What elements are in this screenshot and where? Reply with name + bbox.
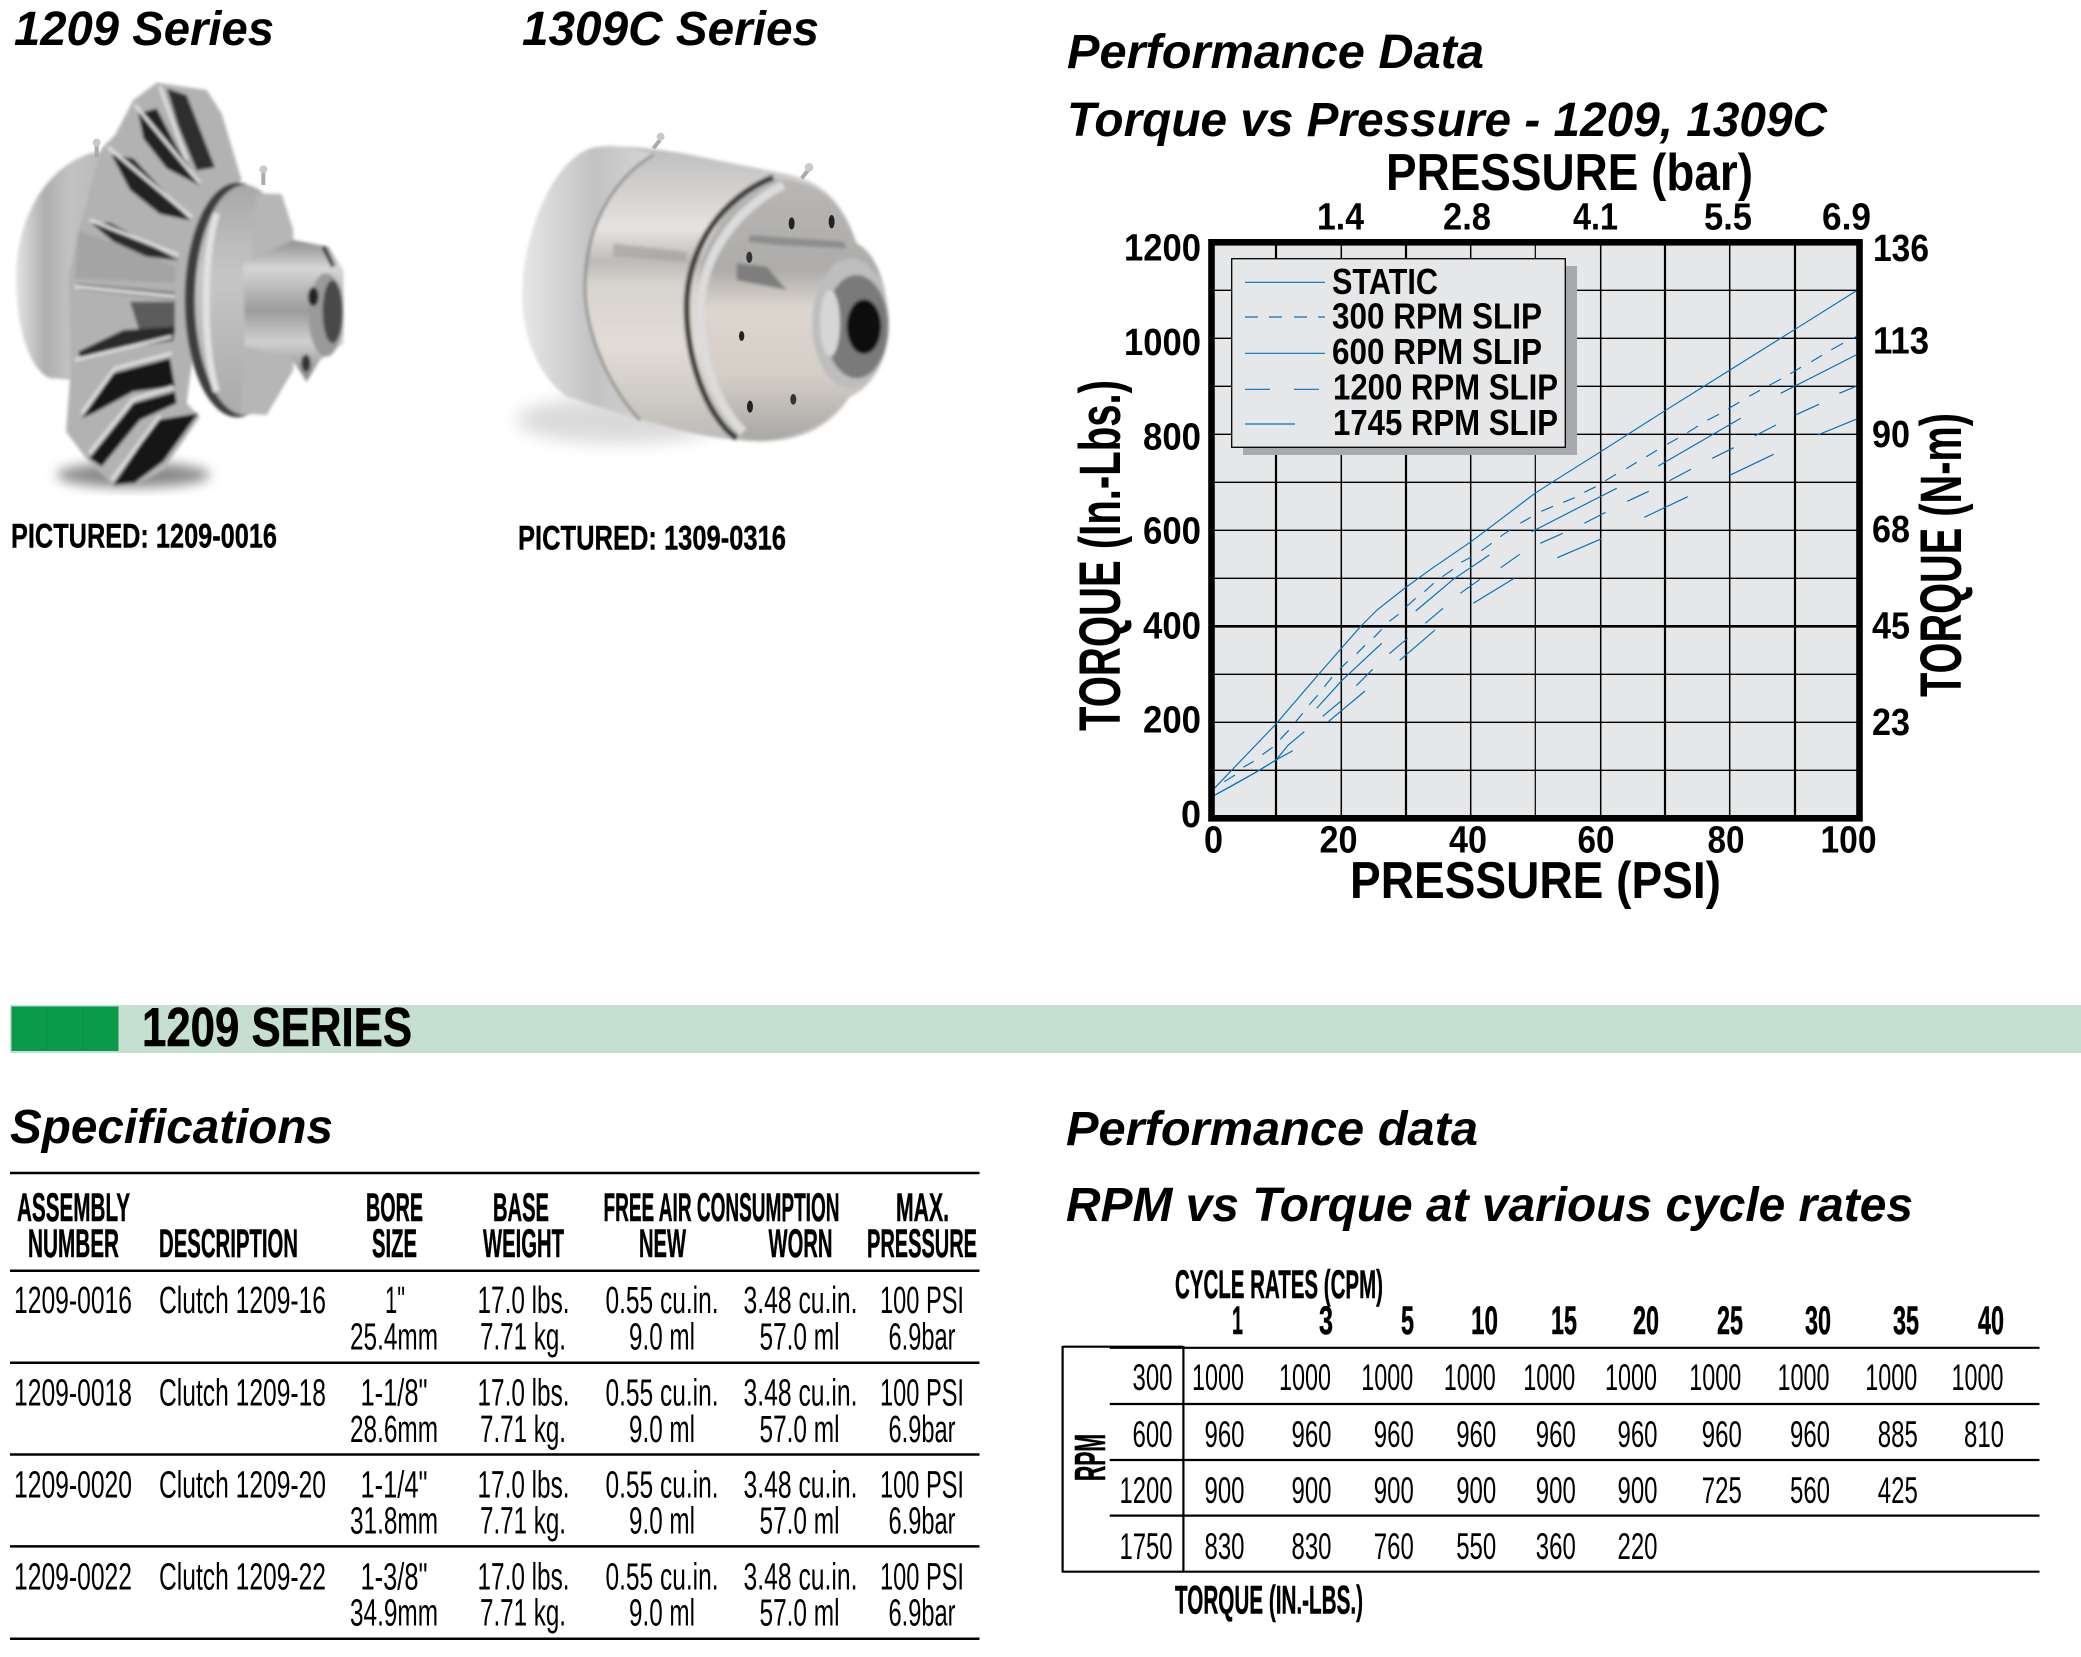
row: 1209-0022: 3.48 cu.in. — [744, 1556, 858, 1598]
row: 600 rpm: 960 — [1618, 1414, 1658, 1455]
heading: 1209 Series: 1209 Series — [14, 3, 274, 56]
table header: BORE — [366, 1186, 423, 1230]
legend: STATIC — [1332, 261, 1438, 302]
row: 300 rpm: 1000 — [1192, 1357, 1244, 1398]
right axis labels: n-m: 23 — [1872, 702, 1910, 744]
row: 1209-0022: 9.0 ml — [629, 1592, 695, 1634]
row: 1209-0020: 7.71 kg. — [480, 1500, 566, 1542]
axis title: torque n-m: TORQUE (N-m) — [1909, 413, 1974, 697]
curve: 300 rpm slip — [1224, 337, 1856, 782]
row: 1209-0016: 17.0 lbs. — [478, 1280, 570, 1322]
row: 1209-0018: 17.0 lbs. — [478, 1372, 570, 1414]
left axis labels: in-lbs: 200 — [1143, 700, 1201, 742]
section band: 1209 series: 1209 SERIES — [142, 996, 412, 1058]
row: 1209-0020: 1-1/4" — [360, 1464, 428, 1506]
row: 300 rpm: 1000 — [1952, 1357, 2004, 1398]
row: 1209-0018 — [14, 1372, 964, 1451]
table header: WEIGHT — [483, 1222, 564, 1266]
bottom axis labels: psi: 0 — [1204, 820, 1223, 862]
row: 1209-0022: 57.0 ml — [760, 1592, 840, 1634]
row: 300 rpm: 1000 — [1361, 1357, 1413, 1398]
column headers: cpm — [1232, 1299, 2004, 1343]
row: 1209-0022: 34.9mm — [350, 1592, 438, 1634]
row: 1750 rpm — [1120, 1526, 1658, 1567]
row: 600 rpm — [1132, 1414, 2004, 1455]
row: 1209-0016: 1" — [385, 1280, 405, 1322]
row: 1209-0022: 1209-0022 — [14, 1556, 132, 1598]
curve: 600 rpm slip — [1215, 355, 1856, 795]
row: 1209-0020: 100 PSI — [880, 1464, 964, 1506]
bottom axis labels: psi: 40 — [1449, 820, 1487, 862]
table rules — [1063, 1346, 2040, 1572]
row: 1209-0016: 6.9bar — [888, 1316, 956, 1358]
heading: Torque vs Pressure: Torque vs Pressure - 1209, 1309C — [1067, 94, 1828, 147]
section band: 1209 series — [10, 996, 2081, 1058]
row: 1200 rpm — [1120, 1470, 1918, 1511]
row: 1200 rpm: 900 — [1456, 1470, 1496, 1511]
row: 300 rpm: 300 — [1132, 1357, 1172, 1398]
left axis labels: in-lbs: 800 — [1143, 416, 1201, 458]
row: 1750 rpm: 830 — [1292, 1526, 1332, 1567]
row: 1209-0022: 17.0 lbs. — [478, 1556, 570, 1598]
axis title: pressure bar: PRESSURE (bar) — [1386, 144, 1753, 202]
legend: 300 RPM SLIP — [1332, 296, 1542, 336]
table header: WORN — [768, 1222, 832, 1266]
row: 600 rpm: 960 — [1702, 1414, 1742, 1455]
right axis labels: n-m: 68 — [1872, 509, 1910, 551]
chart: torque vs pressure — [1068, 144, 1974, 910]
row: 600 rpm: 600 — [1132, 1414, 1172, 1455]
row: 1209-0018: Clutch 1209-18 — [159, 1372, 326, 1414]
row: 600 rpm: 960 — [1456, 1414, 1496, 1455]
top axis labels: bar: 4.1 — [1573, 196, 1618, 238]
heading: RPM vs Torque: RPM vs Torque at various cycle rates — [1066, 1179, 1913, 1232]
legend: 600 RPM SLIP — [1332, 331, 1542, 372]
right axis labels: n-m: 113 — [1873, 320, 1929, 362]
label: cycle rates: CYCLE RATES (CPM) — [1175, 1263, 1383, 1307]
bottom axis labels: psi — [1204, 820, 1876, 862]
column headers: cpm: 15 — [1551, 1299, 1577, 1343]
row: 300 rpm: 1000 — [1778, 1357, 1830, 1398]
row: 1209-0020: 0.55 cu.in. — [606, 1464, 718, 1506]
plot frame — [1212, 242, 1860, 818]
row: 1200 rpm: 900 — [1204, 1470, 1244, 1511]
table header: BASE — [493, 1186, 549, 1230]
heading: Specifications: Specifications — [10, 1101, 333, 1154]
row: 1209-0018: 28.6mm — [350, 1409, 438, 1451]
row: 1200 rpm: 900 — [1292, 1470, 1332, 1511]
row: 1209-0018: 100 PSI — [880, 1372, 964, 1414]
row: 1200 rpm: 900 — [1618, 1470, 1658, 1511]
column headers: cpm: 30 — [1805, 1299, 1831, 1343]
row: 1750 rpm: 1750 — [1120, 1526, 1172, 1567]
row: 600 rpm: 960 — [1536, 1414, 1576, 1455]
table header: NUMBER — [28, 1222, 119, 1266]
top axis labels: bar: 1.4 — [1317, 196, 1364, 238]
row: 300 rpm: 1000 — [1689, 1357, 1741, 1398]
heading: Performance Data: Performance Data — [1067, 26, 1484, 79]
bottom axis labels: psi: 60 — [1578, 820, 1614, 862]
table: specifications: PRESSURE — [867, 1222, 977, 1266]
right axis labels: n-m: 90 — [1872, 414, 1910, 456]
row: 1750 rpm: 220 — [1618, 1526, 1658, 1567]
row: 1209-0020: 1209-0020 — [14, 1464, 132, 1506]
table header: SIZE — [372, 1222, 417, 1266]
row: 1209-0018: 9.0 ml — [629, 1409, 695, 1451]
table: rpm vs torque: RPM — [1066, 1434, 1115, 1481]
table header: FREE AIR CONSUMPTION — [604, 1186, 840, 1230]
row: 1209-0022: Clutch 1209-22 — [159, 1556, 326, 1598]
row: 1209-0022: 7.71 kg. — [480, 1592, 566, 1634]
row: 1209-0018: 7.71 kg. — [480, 1409, 566, 1451]
product image: 1309C housed clutch — [517, 133, 889, 443]
row: 300 rpm: 1000 — [1523, 1357, 1575, 1398]
row: 1209-0018: 3.48 cu.in. — [744, 1372, 858, 1414]
row: 1200 rpm: 725 — [1702, 1470, 1742, 1511]
table header — [17, 1186, 977, 1266]
row: 1209-0020: 57.0 ml — [760, 1500, 840, 1542]
row: 600 rpm: 810 — [1964, 1414, 2004, 1455]
row: 1209-0020: 3.48 cu.in. — [744, 1464, 858, 1506]
row: 1750 rpm: 830 — [1204, 1526, 1244, 1567]
row: 300 rpm: 1000 — [1279, 1357, 1331, 1398]
row: 1209-0020: 6.9bar — [888, 1500, 956, 1542]
right axis labels: n-m — [1872, 228, 1929, 744]
row: 1209-0016: 100 PSI — [880, 1280, 964, 1322]
row: 1209-0018: 0.55 cu.in. — [606, 1372, 718, 1414]
table header: MAX. — [896, 1186, 949, 1230]
row: 1209-0016 — [14, 1280, 964, 1358]
left axis labels: in-lbs: 1000 — [1124, 322, 1201, 364]
row: 1209-0018: 1-1/8" — [360, 1372, 428, 1414]
curve: 1200 rpm slip — [1323, 386, 1856, 716]
legend: 1745 RPM SLIP — [1333, 402, 1558, 443]
caption: pictured 1309-0316: PICTURED: 1309-0316 — [518, 520, 786, 558]
row: 1209-0020: Clutch 1209-20 — [159, 1464, 326, 1506]
column headers: cpm: 1 — [1232, 1299, 1243, 1343]
table: specifications — [10, 1173, 980, 1639]
table header: DESCRIPTION — [159, 1222, 298, 1266]
row: 1209-0022: 1-3/8" — [360, 1556, 428, 1598]
top axis labels: bar — [1317, 196, 1871, 238]
row: 1209-0016: 3.48 cu.in. — [744, 1280, 858, 1322]
table header: ASSEMBLY — [17, 1186, 130, 1230]
curve: static — [1215, 291, 1856, 788]
bottom axis labels: psi: 100 — [1820, 820, 1876, 862]
row: 300 rpm: 1000 — [1605, 1357, 1657, 1398]
bottom axis labels: psi: 80 — [1708, 820, 1744, 862]
table: rpm vs torque — [1063, 1263, 2040, 1622]
row: 1200 rpm: 560 — [1790, 1470, 1830, 1511]
table header: NEW — [639, 1222, 686, 1266]
row: 1209-0020 — [14, 1464, 964, 1542]
column headers: cpm: 5 — [1401, 1299, 1414, 1343]
row: 1750 rpm: 550 — [1456, 1526, 1496, 1567]
row: 1200 rpm: 425 — [1878, 1470, 1918, 1511]
legend — [1232, 259, 1577, 455]
row: 600 rpm: 960 — [1292, 1414, 1332, 1455]
row: 1209-0022: 100 PSI — [880, 1556, 964, 1598]
row: 600 rpm: 960 — [1374, 1414, 1414, 1455]
plot area — [1212, 242, 1860, 818]
row: 300 rpm — [1132, 1357, 2004, 1398]
top axis labels: bar: 5.5 — [1704, 196, 1752, 238]
heading: Performance data: Performance data — [1066, 1103, 1478, 1156]
left axis labels: in-lbs: 0 — [1181, 794, 1201, 836]
column headers: cpm: 3 — [1319, 1299, 1333, 1343]
top axis labels: bar: 2.8 — [1443, 196, 1491, 238]
bottom axis labels: psi: 20 — [1320, 820, 1358, 862]
legend: 1200 RPM SLIP — [1333, 366, 1558, 408]
row: 1200 rpm: 900 — [1374, 1470, 1414, 1511]
row: 1209-0016: 7.71 kg. — [480, 1316, 566, 1358]
row: 1209-0022: 6.9bar — [888, 1592, 956, 1634]
row: 1209-0016: Clutch 1209-16 — [159, 1280, 326, 1322]
left axis labels: in-lbs: 1200 — [1124, 228, 1201, 270]
axis title: torque in-lbs: TORQUE (In.-Lbs.) — [1068, 380, 1133, 731]
row: 300 rpm: 1000 — [1444, 1357, 1496, 1398]
right axis labels: n-m: 45 — [1872, 606, 1910, 648]
curve: 1745 rpm slip — [1215, 419, 1856, 795]
right axis labels: n-m: 136 — [1873, 228, 1929, 270]
heading: 1309C Series: 1309C Series — [522, 3, 819, 56]
axis title: pressure psi: PRESSURE (PSI) — [1350, 852, 1721, 910]
row: 1209-0020: 31.8mm — [350, 1500, 438, 1542]
row: 1209-0018: 6.9bar — [888, 1409, 956, 1451]
label: torque: TORQUE (IN.-LBS.) — [1175, 1578, 1363, 1622]
row: 1209-0022: 0.55 cu.in. — [606, 1556, 718, 1598]
column headers: cpm: 20 — [1633, 1299, 1659, 1343]
column headers: cpm: 40 — [1978, 1299, 2004, 1343]
row: 1209-0016: 9.0 ml — [629, 1316, 695, 1358]
left axis labels: in-lbs — [1124, 228, 1201, 836]
column headers: cpm: 35 — [1893, 1299, 1919, 1343]
row: 1200 rpm: 900 — [1536, 1470, 1576, 1511]
product image: 1209 finned clutch — [16, 83, 343, 488]
row: 1209-0018: 1209-0018 — [14, 1372, 132, 1414]
row: 300 rpm: 1000 — [1865, 1357, 1917, 1398]
left axis labels: in-lbs: 600 — [1143, 510, 1201, 552]
row: 1209-0016: 57.0 ml — [760, 1316, 840, 1358]
row: 1209-0016: 1209-0016 — [14, 1280, 132, 1322]
row: 1209-0020: 17.0 lbs. — [478, 1464, 570, 1506]
row: 1209-0016: 25.4mm — [350, 1316, 438, 1358]
row: 1209-0022 — [14, 1556, 964, 1634]
caption: pictured 1209-0016: PICTURED: 1209-0016 — [11, 518, 277, 556]
row: 1209-0018: 57.0 ml — [760, 1409, 840, 1451]
row: 600 rpm: 960 — [1790, 1414, 1830, 1455]
column headers: cpm: 25 — [1717, 1299, 1743, 1343]
row: 600 rpm: 885 — [1878, 1414, 1918, 1455]
top axis labels: bar: 6.9 — [1822, 196, 1871, 238]
row: 1750 rpm: 760 — [1374, 1526, 1414, 1567]
left axis labels: in-lbs: 400 — [1143, 606, 1201, 648]
row: 1750 rpm: 360 — [1536, 1526, 1576, 1567]
row: 1200 rpm: 1200 — [1120, 1470, 1172, 1511]
row: 1209-0016: 0.55 cu.in. — [606, 1280, 718, 1322]
row: 1209-0020: 9.0 ml — [629, 1500, 695, 1542]
column headers: cpm: 10 — [1471, 1299, 1498, 1343]
row: 600 rpm: 960 — [1204, 1414, 1244, 1455]
